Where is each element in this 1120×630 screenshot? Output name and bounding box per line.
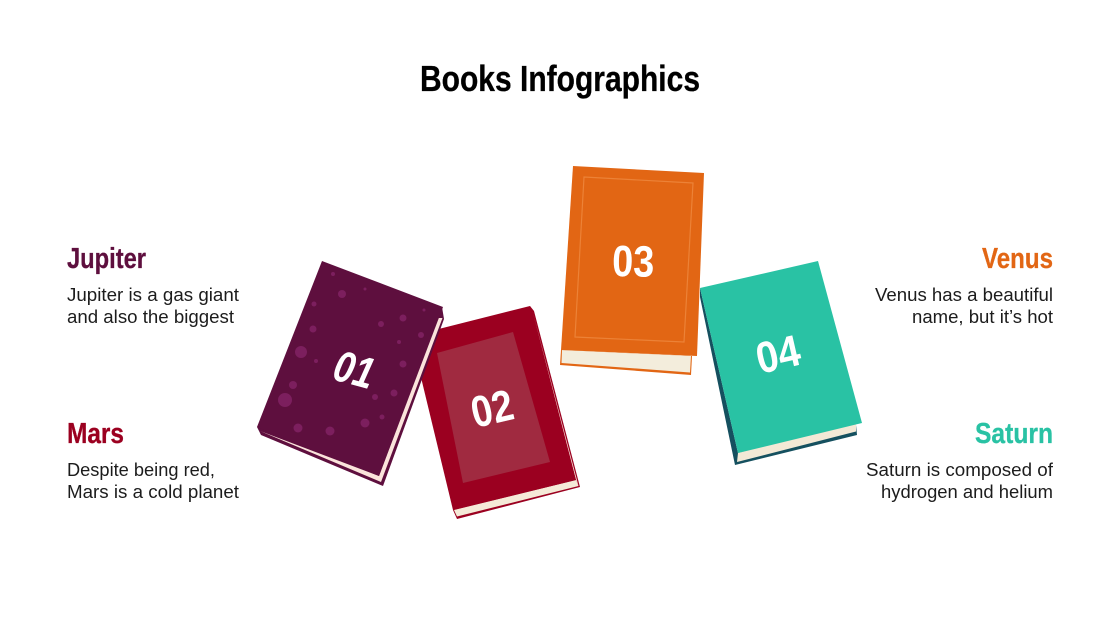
text: Saturn [866,418,1054,502]
number 01: 01 [328,341,380,399]
text: Venus: Venus has a beautiful [875,285,1053,305]
text: Mars: Despite being red, [67,460,215,480]
number 03: 03 [612,237,655,287]
text: Mars [67,418,239,502]
text: Mars: Mars [67,418,124,450]
book 04: teal [700,261,862,465]
text: Venus: Venus [982,243,1053,275]
number 04: 04 [751,326,806,384]
text: Venus: name, but it’s hot [912,307,1053,327]
inner frame [575,177,693,342]
book 02: red [411,306,580,519]
number 02: 02 [466,381,518,438]
text: Jupiter: and also the biggest [67,307,234,327]
text: Saturn: hydrogen and helium [881,482,1053,502]
text: Saturn: Saturn [975,418,1053,450]
book 03: orange [560,166,704,375]
text: Jupiter [67,243,239,327]
book 01: purple [257,261,444,486]
text: Mars: Mars is a cold planet [67,482,239,502]
pages [562,350,691,372]
inner panel [437,332,550,483]
text: Jupiter: Jupiter [67,243,146,275]
cover dots [278,272,426,436]
text: Saturn: Saturn is composed of [866,460,1054,480]
title: Books Infographics [420,58,700,99]
text: Venus [875,243,1053,327]
pages [737,422,856,462]
text: Jupiter: Jupiter is a gas giant [67,285,239,305]
